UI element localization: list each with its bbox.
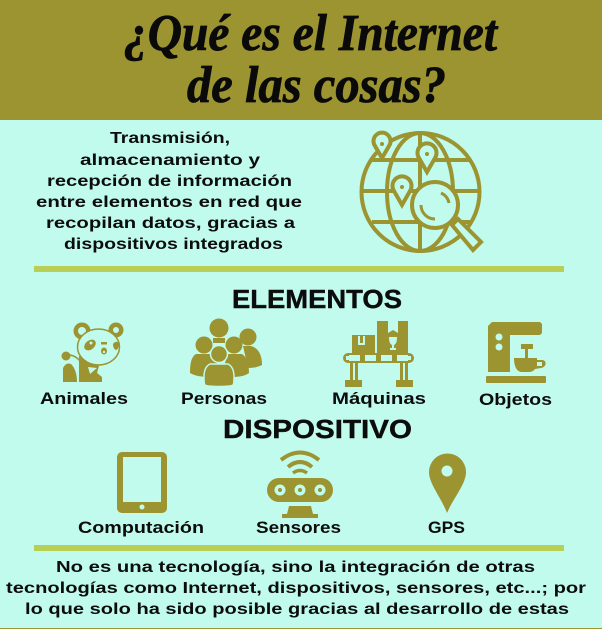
divider <box>34 266 564 272</box>
bottom edge line <box>0 628 602 629</box>
intro text: almacenamiento y <box>80 152 260 169</box>
icon: map pin <box>429 454 466 513</box>
icon: globe with pins and magnifier <box>362 133 481 251</box>
label: personas: Personas <box>181 390 267 408</box>
icon: conveyor machine <box>343 321 414 387</box>
divider <box>34 545 564 551</box>
heading: elementos: ELEMENTOS <box>232 284 402 314</box>
label: maquinas: Máquinas <box>332 390 426 408</box>
title banner <box>0 0 602 120</box>
label: gps: GPS <box>428 519 465 537</box>
icon: sensor <box>267 452 333 518</box>
label: objetos: Objetos <box>479 391 552 409</box>
intro text: entre elementos en red que <box>36 194 302 211</box>
title banner: de las cosas? <box>187 57 446 114</box>
intro text: recopilan datos, gracias a <box>46 215 295 232</box>
closing text: lo que solo ha sido posible gracias al desarrollo de estas <box>25 601 569 618</box>
label: computacion: Computación <box>78 519 204 537</box>
closing text: tecnologías como Internet, dispositivos, sensores, etc...; por <box>6 580 586 597</box>
title banner: ¿Qué es el Internet <box>124 5 498 62</box>
intro text: recepción de información <box>47 173 292 190</box>
closing text <box>6 559 586 618</box>
heading: dispositivo: DISPOSITIVO <box>223 414 412 444</box>
intro text: Transmisión, <box>110 130 230 147</box>
intro text: dispositivos integrados <box>64 236 283 253</box>
icon: panda <box>62 322 124 382</box>
icon: coffee machine <box>486 322 546 383</box>
label: sensores: Sensores <box>256 519 341 537</box>
label: animales: Animales <box>40 390 128 408</box>
icon: tablet <box>117 452 167 513</box>
intro text <box>36 130 302 253</box>
closing text: No es una tecnología, sino la integración de otras <box>56 559 535 576</box>
icon: people group <box>190 318 262 386</box>
